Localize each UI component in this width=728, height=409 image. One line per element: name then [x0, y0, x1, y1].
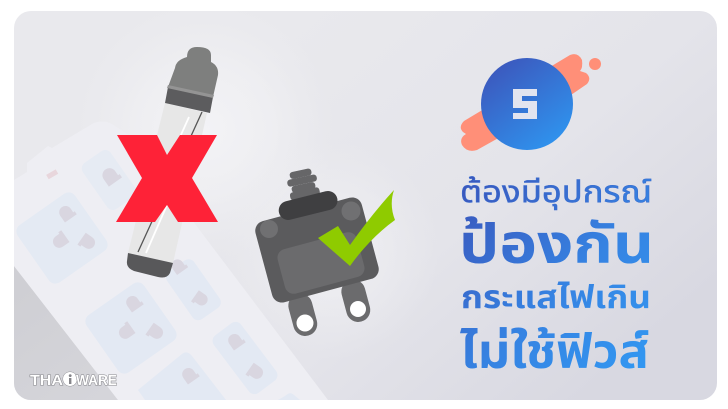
watermark logo: THA [30, 372, 63, 389]
breaker body [253, 195, 381, 305]
badge digit [513, 89, 537, 119]
power strip illustration [14, 168, 328, 400]
socket: small lower right [278, 393, 300, 400]
socket: large centre [86, 282, 176, 374]
watermark logo [30, 372, 117, 389]
breaker panel [275, 230, 367, 296]
socket: small right [212, 322, 278, 394]
breaker screw right [342, 202, 360, 220]
heading line 3: กระแสไฟเกิน [461, 279, 651, 315]
socket: small top [102, 168, 122, 187]
icon: circuit breaker [253, 167, 381, 339]
heading line 1: ต้องมีอุปกรณ์ [460, 176, 652, 210]
socket: large bottom [138, 352, 226, 400]
icon: number five badge [461, 54, 601, 151]
heading [459, 176, 654, 379]
breaker top cap [277, 189, 340, 222]
breaker screw left [260, 220, 278, 238]
badge streaks [461, 54, 589, 151]
icon: fuse [127, 47, 218, 278]
heading line 4: ไม่ใช้ฟิวส์ [460, 326, 649, 379]
badge circle [481, 58, 573, 150]
socket: large left [16, 192, 108, 284]
watermark logo: WARE [76, 372, 117, 389]
socket: small centre [166, 260, 220, 320]
breaker terminal left [286, 291, 320, 339]
icon: red cross [116, 135, 218, 222]
indicator light [46, 169, 58, 179]
icon: green check mark [318, 190, 395, 266]
heading line 2: ป้องกัน [459, 213, 654, 275]
breaker threaded stud [285, 167, 322, 207]
badge dot [589, 58, 601, 70]
breaker terminal right [339, 277, 373, 325]
